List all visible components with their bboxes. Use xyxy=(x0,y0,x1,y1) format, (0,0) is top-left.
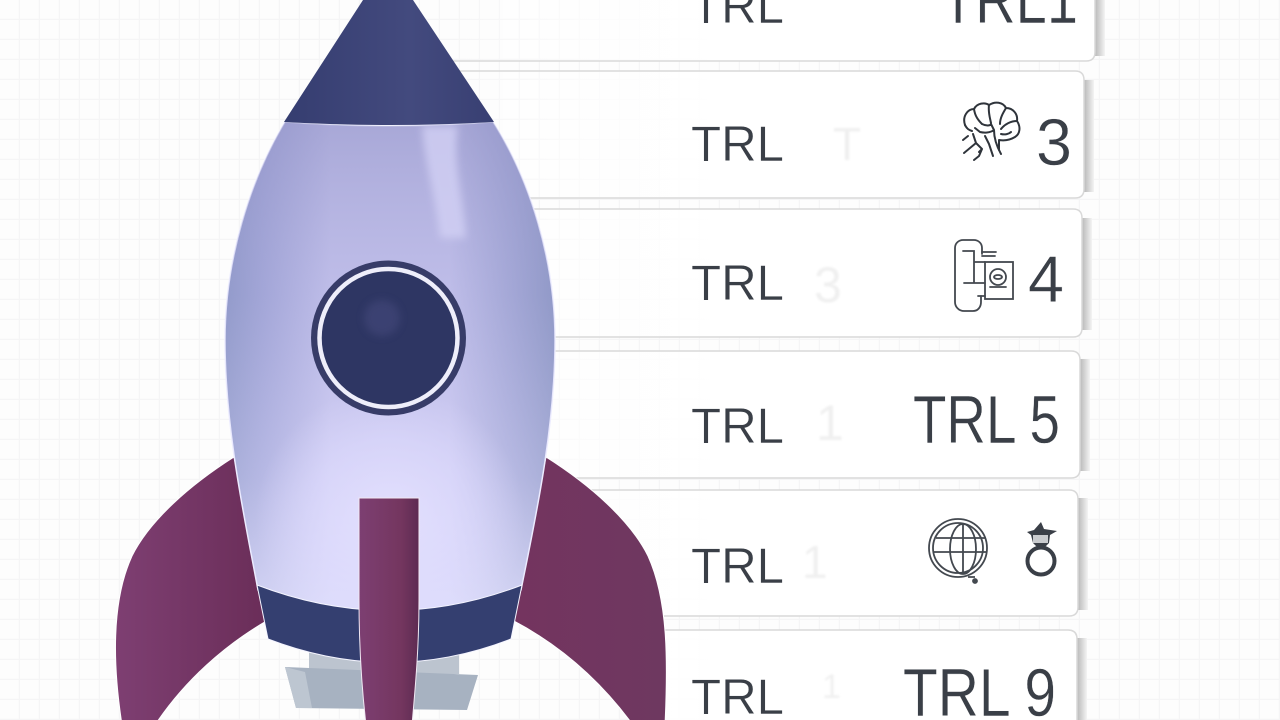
card: TRL 3: TRL xyxy=(691,116,784,172)
ghost digit: 1 xyxy=(816,395,844,451)
number 3: 3 xyxy=(1036,105,1072,179)
card: TRL 9 xyxy=(640,630,1087,720)
panel: TRL cards xyxy=(445,0,1105,720)
rocket illustration xyxy=(115,0,666,720)
card: TRL 8: TRL xyxy=(691,538,784,594)
porthole xyxy=(311,260,466,416)
card: TRL 4 xyxy=(525,209,1092,337)
left fin xyxy=(115,457,268,720)
icon: brain xyxy=(963,103,1019,160)
centre fin xyxy=(359,498,419,720)
rocket body xyxy=(225,122,555,640)
number 8 xyxy=(1027,522,1057,574)
nose cone xyxy=(284,0,494,125)
card: TRL 8 xyxy=(580,490,1088,616)
ghost digit: 3 xyxy=(814,257,842,313)
right fin xyxy=(512,457,666,720)
card: TRL 4: 4 xyxy=(1028,242,1064,316)
card: TRL 5: TRL 5 xyxy=(913,382,1060,458)
card: TRL 3 xyxy=(455,71,1094,198)
highlight xyxy=(422,126,466,238)
icon: globe xyxy=(929,519,987,583)
nozzle xyxy=(285,650,478,710)
icon: device xyxy=(955,240,1013,311)
ghost digit: 1 xyxy=(802,536,828,588)
card: TRL 1 xyxy=(445,0,1105,61)
ghost digit: T xyxy=(833,118,861,170)
base band xyxy=(257,585,522,662)
ghost digit: 1 xyxy=(822,668,841,706)
card: TRL 5 xyxy=(530,351,1090,478)
card: TRL 5: TRL xyxy=(691,398,784,454)
card: TRL 4: TRL xyxy=(691,255,784,311)
